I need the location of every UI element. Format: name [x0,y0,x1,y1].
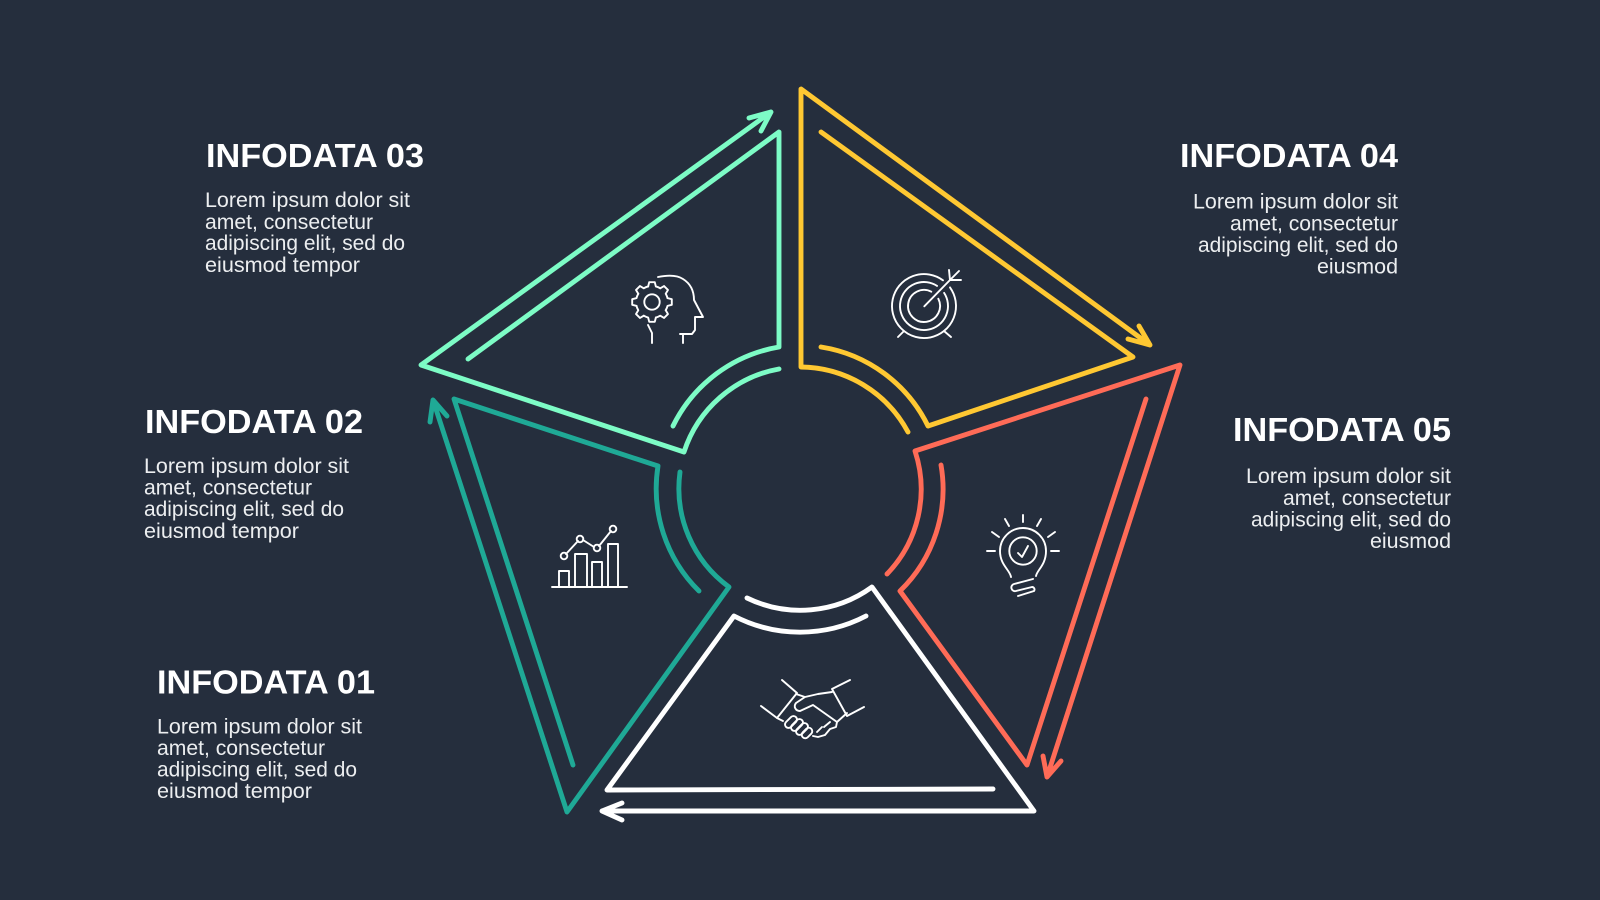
text block: INFODATA 03 [205,137,424,277]
icon: handshake [761,680,864,740]
panel: segment 04 pentagon piece [801,89,1150,432]
body text 01: Lorem ipsum dolor sit [157,716,362,738]
text block: INFODATA 01 [157,664,375,803]
body text 05: amet, consectetur [1283,487,1451,510]
body text 04: eiusmod [1317,256,1398,278]
body text 01: adipiscing elit, sed do [157,758,357,782]
heading: INFODATA 02: INFODATA 02 [145,403,363,440]
heading: INFODATA 03: INFODATA 03 [206,137,424,174]
body text 02 [144,455,349,543]
panel: segment 01 pentagon piece [602,587,1034,820]
panel: segment 05 pentagon piece [887,365,1180,777]
body text 01: amet, consectetur [157,737,325,760]
body text 05: Lorem ipsum dolor sit [1246,465,1451,488]
body text 04: amet, consectetur [1230,212,1398,236]
icon: bar chart with trend line [552,526,627,587]
text block: INFODATA 05 [1233,411,1451,553]
icon: target with arrow [892,270,961,338]
body text 02: eiusmod tempor [144,520,299,543]
body text 03: amet, consectetur [205,211,373,234]
body text 02: adipiscing elit, sed do [144,498,344,521]
body text 03: Lorem ipsum dolor sit [205,189,410,212]
body text 04 [1193,190,1398,278]
body text 05 [1246,465,1451,553]
body text 05: adipiscing elit, sed do [1251,508,1451,532]
body text 03: adipiscing elit, sed do [205,232,405,255]
body text 02: amet, consectetur [144,476,312,500]
body text 03: eiusmod tempor [205,254,360,277]
body text 04: adipiscing elit, sed do [1198,234,1398,257]
body text 04: Lorem ipsum dolor sit [1193,190,1398,214]
heading: INFODATA 01: INFODATA 01 [157,664,375,700]
heading: INFODATA 05: INFODATA 05 [1233,411,1451,448]
heading: INFODATA 04: INFODATA 04 [1180,137,1399,174]
body text 01: eiusmod tempor [157,780,312,803]
body text 05: eiusmod [1370,530,1451,553]
body text 01 [157,716,362,803]
icon: head with gear [632,276,703,343]
panel: segment 02 pentagon piece [430,399,729,812]
body text 03 [205,189,410,277]
text block: INFODATA 04 [1180,137,1399,278]
icon: light bulb with check [987,515,1059,596]
text block: INFODATA 02 [144,403,363,543]
panel: segment 03 pentagon piece [421,112,779,452]
body text 02: Lorem ipsum dolor sit [144,455,349,478]
